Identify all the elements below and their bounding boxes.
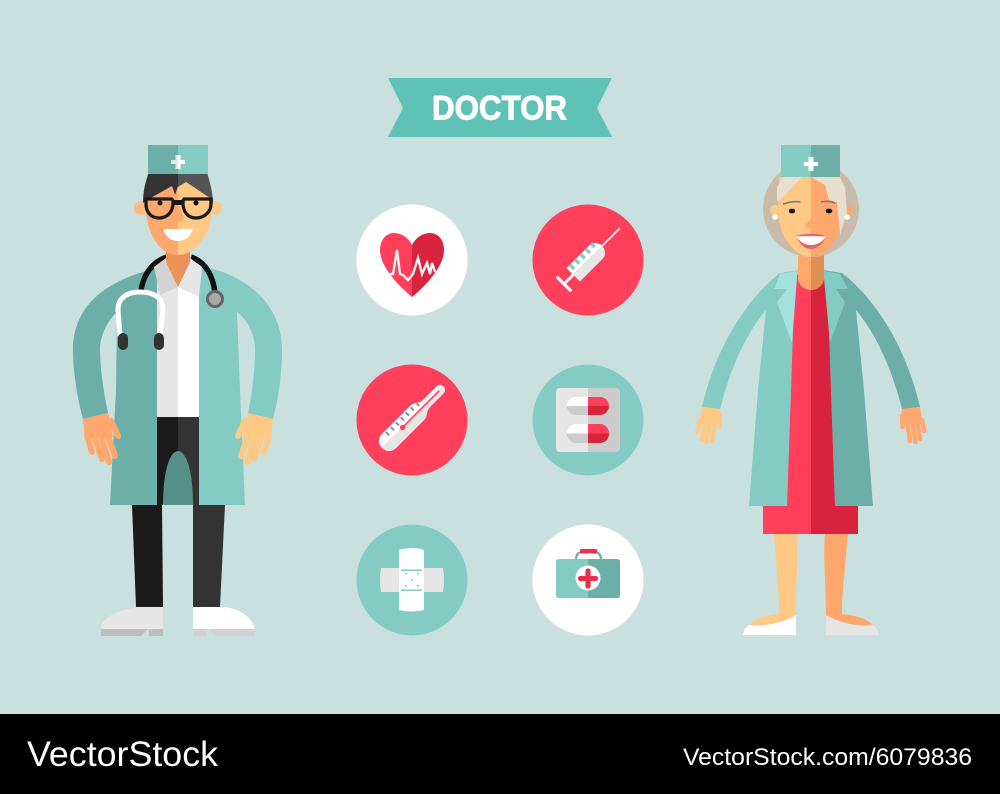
icon: blister pack of pills — [532, 364, 644, 476]
nurse smile — [796, 234, 826, 249]
footer image id: VectorStock.com/6079836 — [683, 744, 972, 771]
stethoscope chest piece — [206, 290, 224, 308]
nurse left hand — [698, 407, 722, 442]
nurse lapels — [774, 271, 848, 343]
shirt collar — [154, 258, 202, 297]
nurse neck — [798, 250, 824, 290]
footer brand name: VectorStock — [27, 735, 219, 774]
doctor right hand — [238, 413, 273, 462]
doctor shirt — [157, 280, 199, 417]
doctor head — [134, 172, 222, 255]
neck — [166, 250, 190, 287]
glasses — [146, 199, 211, 218]
title banner: DOCTOR — [388, 78, 612, 137]
male doctor character — [73, 145, 282, 636]
stethoscope neck tube — [141, 257, 215, 293]
doctor left hand — [83, 413, 118, 462]
earrings — [772, 214, 778, 220]
nurse dress — [763, 275, 858, 534]
nurse coat left side with arm — [702, 270, 800, 506]
icon: thermometer — [356, 364, 468, 476]
nurse shoes — [743, 615, 879, 635]
doctor trousers — [132, 417, 225, 607]
stethoscope white tube and ear tips — [118, 292, 164, 350]
title banner: DOCTOR: DOCTOR — [432, 90, 567, 128]
doctor cap — [148, 145, 208, 174]
nurse cap — [781, 145, 840, 177]
female doctor character — [698, 145, 924, 635]
watermark footer bar — [0, 714, 1000, 794]
nurse legs — [748, 534, 874, 627]
nurse coat right side with arm — [822, 270, 920, 506]
icon: syringe — [532, 204, 644, 316]
doctor arm and coat: left side — [73, 264, 160, 505]
smile — [163, 229, 193, 241]
doctor arm and coat: right side — [196, 264, 282, 505]
icon: first aid kit — [532, 524, 644, 636]
nurse head — [763, 161, 859, 257]
icon: heart with pulse — [356, 204, 468, 316]
icon: adhesive bandage — [356, 524, 468, 636]
doctor shoes — [101, 607, 255, 636]
nurse right hand — [900, 407, 924, 442]
